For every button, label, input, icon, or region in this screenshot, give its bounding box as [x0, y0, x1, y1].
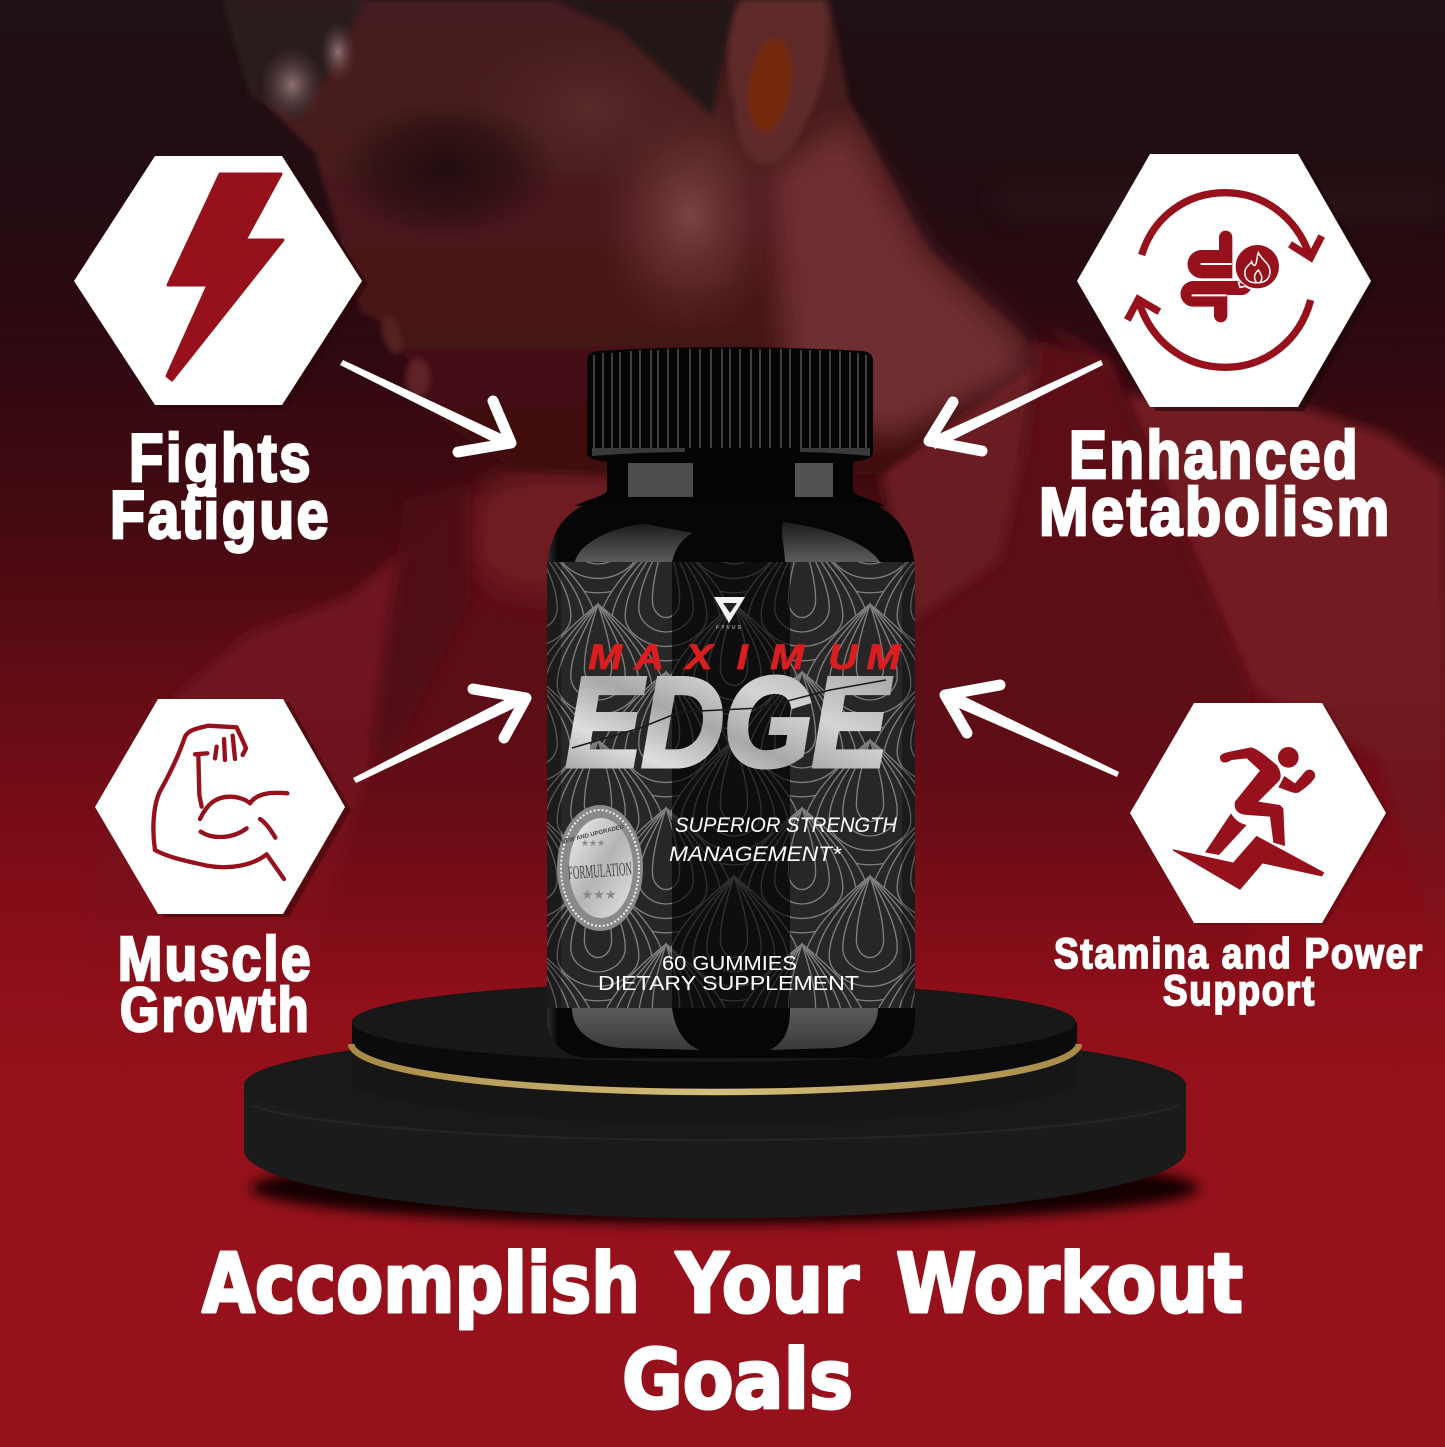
ear — [729, 0, 829, 164]
hexagon — [1077, 154, 1371, 407]
upper disc top — [352, 982, 1076, 1062]
fade to red — [0, 680, 1445, 1040]
quantity and type: 60 GUMMIES — [662, 953, 797, 975]
hexagon — [95, 699, 345, 914]
hexagon — [1130, 703, 1386, 923]
eye socket — [330, 100, 560, 240]
arrow: stamina to bottle — [945, 685, 1119, 777]
neck highlights — [628, 463, 833, 497]
benefit: stamina and power — [1054, 703, 1424, 1015]
neck base skin — [880, 340, 1040, 620]
gym backdrop highlight — [1000, 190, 1445, 212]
brand logo: FYVUS — [716, 625, 743, 631]
bottle cap — [587, 347, 873, 462]
benefit: fights fatigue — [74, 156, 368, 553]
MAXIMUM wordmark: MAXIMUM — [588, 639, 902, 677]
tagline — [669, 814, 898, 866]
arrow: metabolism to bottle — [929, 360, 1103, 451]
bottom gloss — [572, 1008, 878, 1050]
quantity and type: DIETARY SUPPLEMENT — [598, 973, 859, 995]
icon: runner — [1173, 747, 1323, 889]
right shoulder skin — [1040, 320, 1445, 980]
benefit: enhanced metabolism — [1039, 154, 1392, 550]
background photo: athlete — [0, 0, 1445, 1040]
heading: Growth — [120, 976, 311, 1045]
EDGE cracks — [572, 680, 886, 748]
formulation seal: ★★★ — [581, 838, 605, 848]
bottle body — [547, 503, 915, 1058]
slogan: Accomplish — [202, 1237, 640, 1332]
pedestal — [244, 982, 1199, 1224]
head and face — [228, 0, 1040, 475]
forehead sweat highlights — [260, 22, 356, 123]
pedestal shadow — [251, 1152, 1199, 1224]
tagline: MANAGEMENT* — [669, 843, 842, 866]
icon: flexed arm — [153, 726, 287, 879]
bottle neck — [575, 452, 885, 506]
heading: Enhanced — [1069, 417, 1360, 493]
product bottle — [547, 347, 915, 1058]
arrow: fatigue to bottle — [340, 360, 511, 452]
formulation seal — [557, 805, 643, 931]
brand logo — [714, 597, 745, 631]
heading: Support — [1163, 967, 1316, 1015]
gold ring — [351, 1044, 1079, 1092]
nose and lips — [377, 313, 430, 398]
heading: Muscle — [118, 925, 313, 994]
icon: lightning bolt — [167, 174, 283, 380]
slogan: Your — [675, 1237, 859, 1332]
neck highlight — [770, 120, 1030, 440]
slogan: Goals — [622, 1333, 853, 1428]
hexagon — [74, 156, 362, 405]
heading: Metabolism — [1039, 474, 1392, 550]
label — [547, 562, 915, 1008]
formulation seal: ★★★ — [582, 887, 616, 902]
heading: Fights — [129, 420, 313, 496]
lower disc — [244, 1085, 1186, 1218]
arrow: muscle to bottle — [353, 689, 526, 783]
shoulder highlights — [575, 522, 880, 562]
tagline: SUPERIOR STRENGTH — [675, 814, 898, 837]
left shoulder skin — [70, 547, 407, 1000]
formulation seal: NEW AND UPGRADED — [561, 824, 625, 846]
collar skin — [470, 470, 640, 600]
slogan: Workout — [896, 1237, 1243, 1332]
lower disc rim — [250, 1105, 1180, 1140]
EDGE wordmark: EDGE — [566, 651, 891, 793]
left strap — [372, 482, 470, 760]
chest under tank top — [230, 340, 1250, 1000]
cheek highlights — [460, 20, 785, 340]
quantity and type — [598, 953, 859, 995]
inner step — [352, 1050, 1077, 1124]
benefit: muscle growth — [95, 699, 351, 1045]
icon: digestion cycle — [1127, 193, 1322, 367]
formulation seal: FORMULATION — [567, 859, 633, 884]
heading: Fatigue — [110, 477, 331, 553]
hair — [222, 0, 735, 120]
upper disc side — [352, 1022, 1077, 1092]
